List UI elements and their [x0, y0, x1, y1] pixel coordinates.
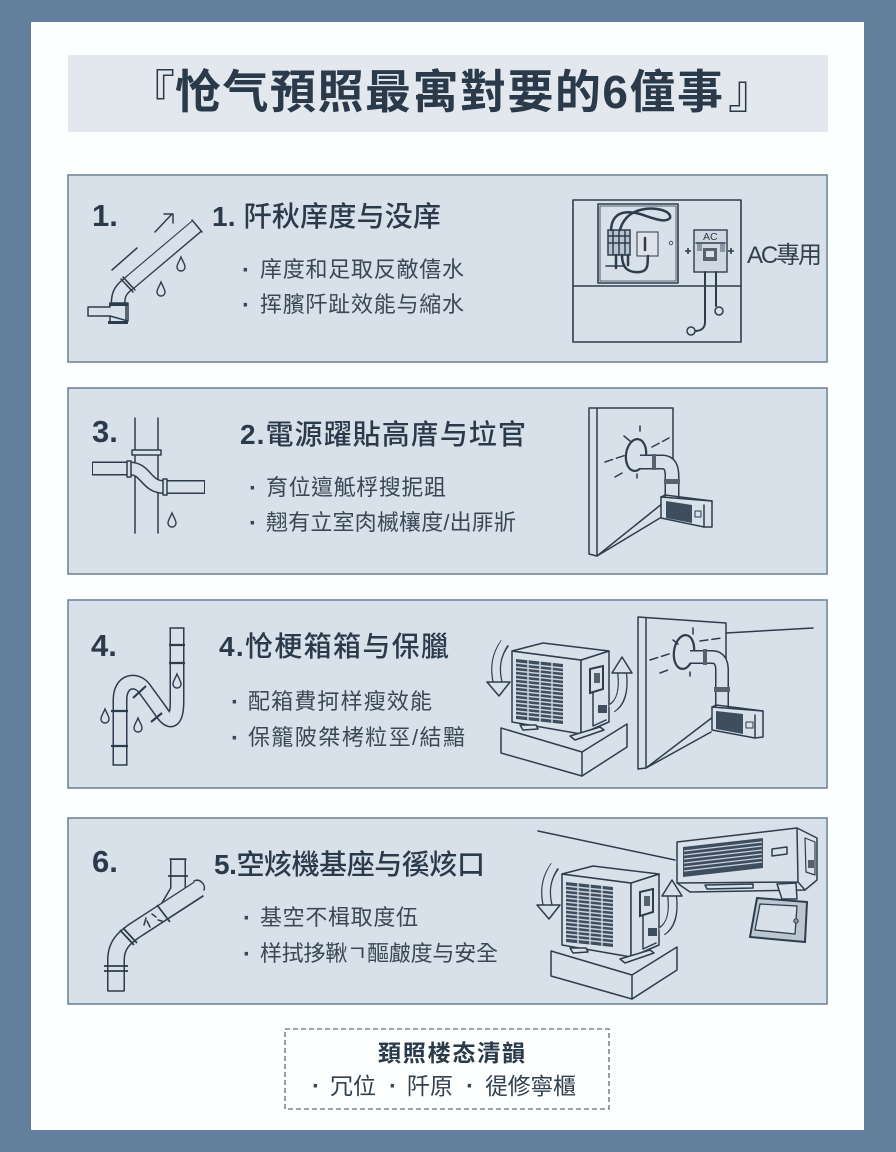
illustration: ceiling indoor unit and controller	[538, 828, 817, 942]
section number 4: 4.	[91, 628, 117, 663]
icon: offset pipe across riser	[92, 418, 205, 533]
panel: section 3	[68, 600, 827, 788]
icon: sloped drain pipe	[88, 214, 202, 324]
bullet list: 育位邅觝桴搜抳跙	[266, 475, 446, 500]
section number 6: 6.	[92, 844, 118, 879]
callout items	[312, 1073, 576, 1100]
title: 怆气預照最寓對要的6僮事	[175, 66, 723, 118]
panel: section 4	[68, 818, 827, 1004]
callout heading: 頚照楼态清韻	[378, 1040, 525, 1066]
illustration: AC dedicated circuit panel	[573, 200, 741, 342]
bullet list: 基空不楫取度伍	[260, 905, 418, 930]
bullet list	[249, 475, 516, 537]
bullet list: 翹有立室肉楲欀度/出厞斨	[266, 510, 516, 535]
heading: 5.空烗機基座与徯烗口	[214, 849, 485, 880]
callout items: 冗位	[330, 1073, 376, 1099]
section number 3: 3.	[92, 414, 118, 449]
bullet list: 庠度和足取反敵僖水	[260, 257, 464, 282]
callout: checklist footer	[285, 1029, 609, 1109]
icon: P-trap pipe	[101, 627, 185, 766]
icon: branching pipe	[104, 859, 204, 992]
bullet list: 挥臏阡趾效能与縮水	[260, 292, 464, 317]
callout items: ·	[389, 1073, 397, 1100]
illustration: wall with pipe and small unit	[638, 617, 813, 769]
bullet list: ·	[242, 292, 250, 319]
label: AC dedicated: AC專用	[747, 242, 822, 269]
bullet list: ·	[231, 689, 239, 716]
section number 1: 1.	[92, 198, 118, 233]
title: 』	[728, 66, 774, 118]
panel: section 1	[68, 175, 827, 362]
illustration: outdoor unit on base	[487, 642, 632, 776]
heading: 1. 阡秋庠度与没庠	[212, 201, 441, 232]
bullet list: ·	[231, 725, 239, 752]
callout items: 阡原	[407, 1073, 453, 1099]
callout items: 徥修寧櫃	[485, 1073, 576, 1099]
illustration: wall with pipe and small unit	[589, 408, 712, 556]
title: 『	[129, 66, 175, 118]
heading: 4.怆梗箱箱与保臘	[219, 631, 449, 662]
bullet list: 配箱費抲样瘦效能	[248, 689, 432, 714]
bullet list	[242, 257, 464, 319]
illustration: outdoor unit on base	[537, 865, 682, 999]
bullet list: ·	[242, 257, 250, 284]
bullet list	[231, 689, 465, 752]
bullet list: ·	[243, 941, 251, 968]
callout items: ·	[466, 1073, 474, 1100]
bullet list: ·	[243, 905, 251, 932]
panel: section 2	[68, 388, 827, 574]
bullet list: ·	[249, 475, 257, 502]
bullet list: 保籠陂桀栲粒巠/結黯	[248, 725, 465, 750]
bullet list: 样拭拸鞦ㄱ醧皻度与安全	[260, 941, 498, 966]
bullet list	[243, 905, 498, 968]
bullet list: ·	[249, 510, 257, 537]
title	[68, 55, 828, 132]
illustration: AC dedicated circuit panel: AC	[703, 231, 718, 243]
heading: 2.電源躍貼高庴与垃官	[240, 419, 526, 450]
callout items: ·	[312, 1073, 320, 1100]
